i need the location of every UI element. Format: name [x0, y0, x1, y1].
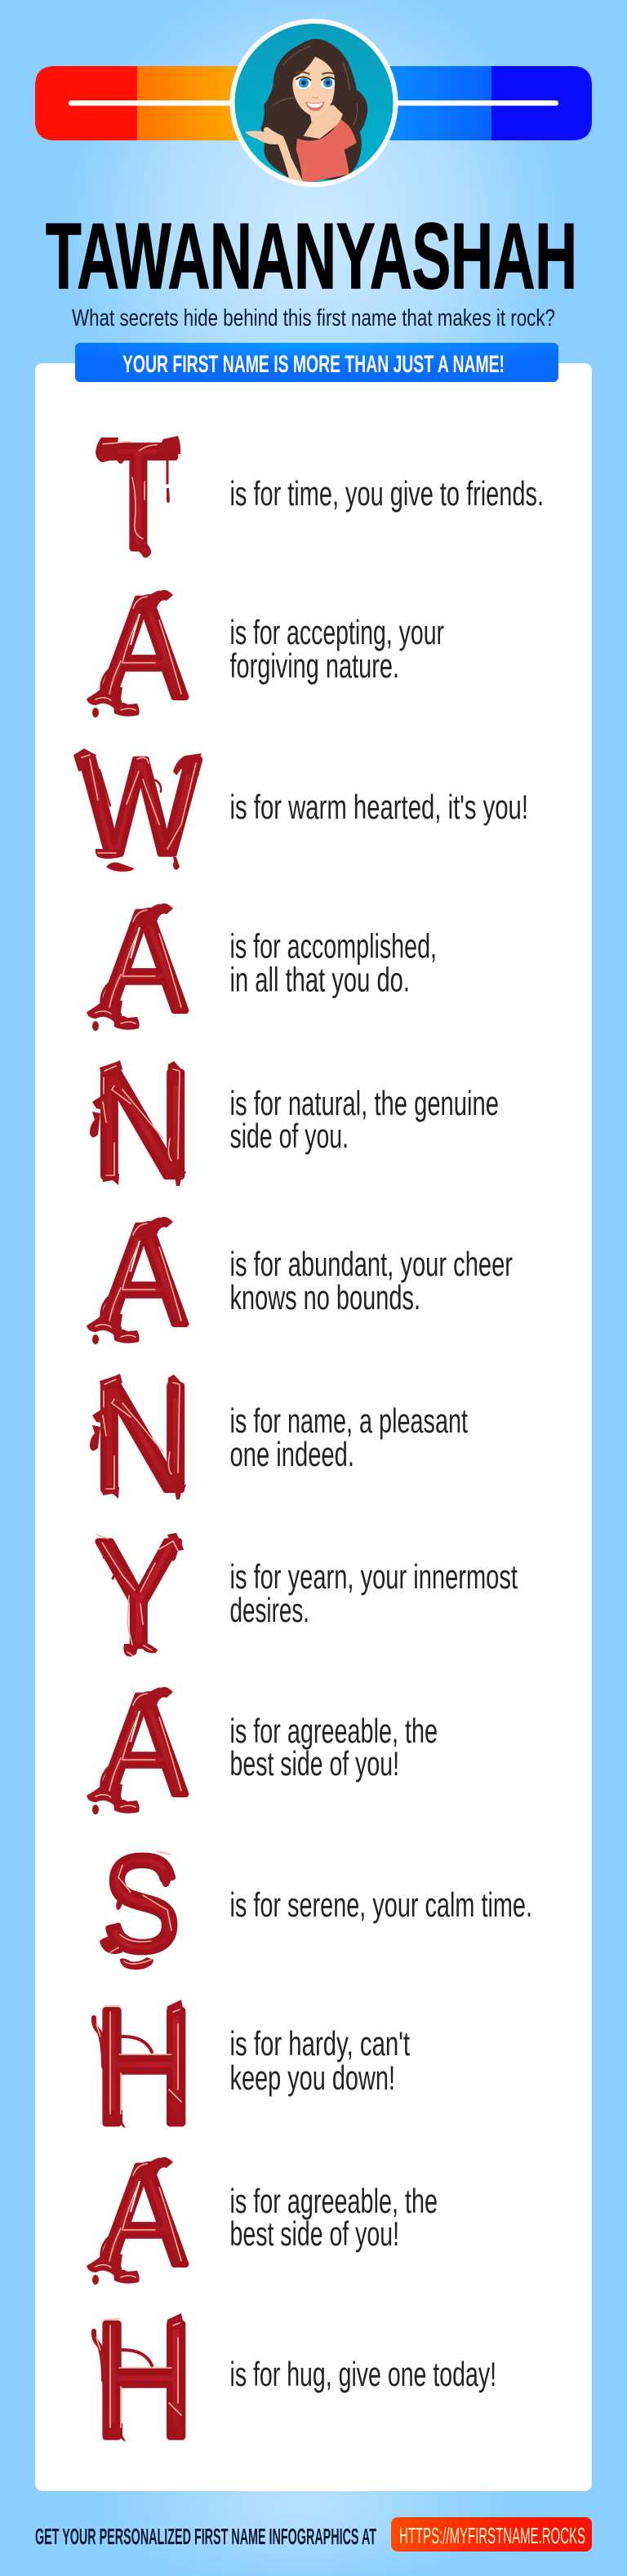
text lines A [230, 2182, 438, 2253]
text lines A: knows no bounds. [230, 1278, 420, 1317]
letter A: A [101, 882, 186, 1042]
header ribbon bar [35, 66, 592, 140]
text lines A: best side of you! [230, 2214, 399, 2253]
text lines A: is for accepting, your [230, 613, 444, 651]
row: W [73, 731, 528, 883]
row: N [90, 1353, 468, 1521]
icon: avatar of smiling woman in circle [230, 19, 398, 187]
letter H: H [94, 1976, 193, 2158]
text lines N: side of you. [230, 1117, 349, 1155]
text line H: is for hug, give one today! [230, 2355, 496, 2393]
row: H [94, 2290, 496, 2472]
text lines A [230, 1245, 513, 1317]
text lines H: keep you down! [230, 2059, 395, 2097]
letter A: A [101, 1196, 186, 1355]
text lines A: best side of you! [230, 1744, 399, 1783]
text lines A: is for agreeable, the [230, 1712, 438, 1750]
row: A [87, 1666, 438, 1825]
letter T: T [99, 415, 178, 580]
text lines A: is for agreeable, the [230, 2182, 438, 2220]
text lines A: is for accomplished, [230, 927, 437, 965]
row: T [96, 415, 544, 580]
letter H: H [94, 2290, 193, 2472]
letter A: A [101, 2136, 186, 2295]
text lines A [230, 613, 444, 685]
footer url button [391, 2517, 592, 2552]
letter S: S [103, 1828, 180, 1980]
row: H [94, 1976, 410, 2158]
text lines N: is for name, a pleasant [230, 1401, 468, 1440]
text lines Y: desires. [230, 1591, 309, 1629]
text lines N [230, 1401, 468, 1473]
row: A [87, 2136, 438, 2295]
text lines Y [230, 1557, 518, 1629]
row: A [87, 569, 444, 728]
text lines A: is for abundant, your cheer [230, 1245, 513, 1283]
letter A: A [101, 1666, 186, 1825]
letter W: W [81, 731, 200, 883]
row: A [87, 1196, 513, 1355]
text lines N [230, 1084, 499, 1155]
letter N: N [92, 1353, 193, 1521]
text lines N: one indeed. [230, 1435, 354, 1473]
text lines N: is for natural, the genuine [230, 1084, 499, 1122]
row: S [100, 1828, 532, 1980]
banner [75, 343, 558, 382]
text lines A: forgiving nature. [230, 646, 399, 685]
row: A [87, 882, 437, 1042]
text lines H [230, 2024, 410, 2097]
text lines A [230, 927, 437, 999]
text lines A [230, 1712, 438, 1783]
row: N [90, 1040, 499, 1208]
panel: white content card [35, 363, 592, 2491]
text lines A: in all that you do. [230, 960, 410, 999]
letter Y: Y [95, 1508, 182, 1678]
row: Y [95, 1508, 518, 1678]
letter A: A [101, 569, 186, 728]
text lines H: is for hardy, can't [230, 2024, 410, 2063]
letter N: N [92, 1040, 193, 1208]
